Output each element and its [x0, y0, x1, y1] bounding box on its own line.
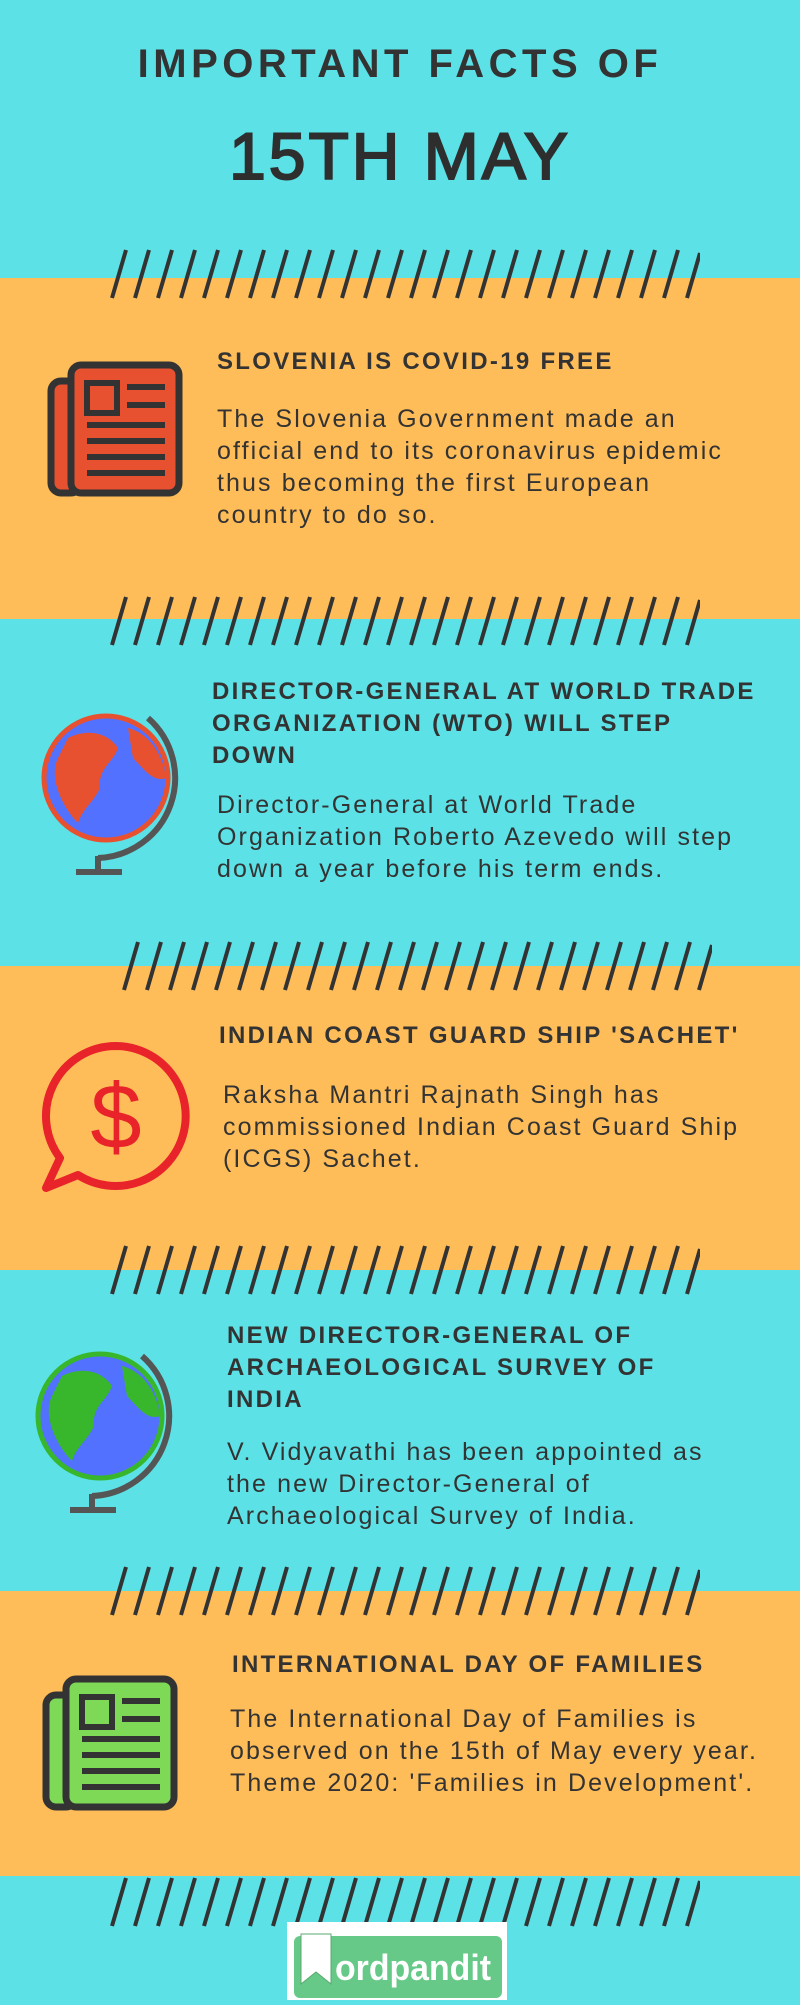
heading 2 — [212, 678, 756, 769]
heading 3: INDIAN COAST GUARD SHIP 'SACHET' — [219, 1022, 740, 1049]
text 1: official end to its coronavirus epidemic — [217, 437, 723, 465]
icon: dollar speech bubble — [42, 1042, 190, 1192]
text 3 — [223, 1081, 739, 1173]
text 2 — [217, 791, 733, 883]
text 2: down a year before his term ends. — [217, 855, 664, 883]
heading 2: DOWN — [212, 742, 297, 769]
heading 4: INDIA — [227, 1386, 304, 1413]
logo: ordpandit — [335, 1947, 491, 1988]
panel: wto — [0, 619, 800, 966]
panel: sachet — [0, 966, 800, 1270]
logo — [287, 1922, 507, 2000]
text 1 — [217, 405, 723, 529]
panel: slovenia — [0, 278, 800, 619]
text 4: the new Director-General of — [227, 1470, 591, 1498]
text 5: Theme 2020: 'Families in Development'. — [230, 1769, 754, 1797]
slashes divider 6 — [110, 1878, 700, 1926]
text 5 — [230, 1705, 758, 1797]
text 1: thus becoming the first European — [217, 469, 651, 497]
text 1: country to do so. — [217, 501, 438, 529]
text 2: Organization Roberto Azevedo will step — [217, 823, 733, 851]
heading 4: ARCHAEOLOGICAL SURVEY OF — [227, 1354, 656, 1381]
icon: dollar speech bubble: $ — [90, 1066, 142, 1168]
slashes divider 1 — [110, 250, 700, 298]
icon: newspaper green — [42, 1676, 178, 1810]
icon: globe green — [36, 1352, 172, 1513]
text 5: The International Day of Families is — [230, 1705, 697, 1733]
text 5: observed on the 15th of May every year. — [230, 1737, 758, 1765]
text 4: V. Vidyavathi has been appointed as — [227, 1438, 704, 1466]
heading 2: ORGANIZATION (WTO) WILL STEP — [212, 710, 672, 737]
text 3: commissioned Indian Coast Guard Ship — [223, 1113, 739, 1141]
text 3: (ICGS) Sachet. — [223, 1145, 422, 1173]
title: IMPORTANT FACTS OF — [138, 42, 662, 86]
slashes divider 4 — [110, 1246, 700, 1294]
text 4 — [227, 1438, 704, 1530]
panel: header — [0, 0, 800, 278]
text 4: Archaeological Survey of India. — [227, 1502, 637, 1530]
heading 2: DIRECTOR-GENERAL AT WORLD TRADE — [212, 678, 756, 705]
subtitle date: 15TH MAY — [229, 119, 571, 193]
text 2: Director-General at World Trade — [217, 791, 637, 819]
heading 5: INTERNATIONAL DAY OF FAMILIES — [232, 1651, 705, 1678]
panel: families — [0, 1591, 800, 1876]
heading 4 — [227, 1322, 656, 1413]
panel: asi — [0, 1270, 800, 1591]
slashes divider 2 — [110, 596, 700, 646]
heading 1: SLOVENIA IS COVID-19 FREE — [217, 348, 614, 375]
icon: newspaper red — [48, 362, 182, 496]
text 1: The Slovenia Government made an — [217, 405, 677, 433]
heading 4: NEW DIRECTOR-GENERAL OF — [227, 1322, 632, 1349]
slashes divider 5 — [110, 1566, 700, 1616]
slashes divider 3 — [122, 942, 712, 990]
text 3: Raksha Mantri Rajnath Singh has — [223, 1081, 661, 1109]
icon: globe red — [42, 714, 178, 875]
